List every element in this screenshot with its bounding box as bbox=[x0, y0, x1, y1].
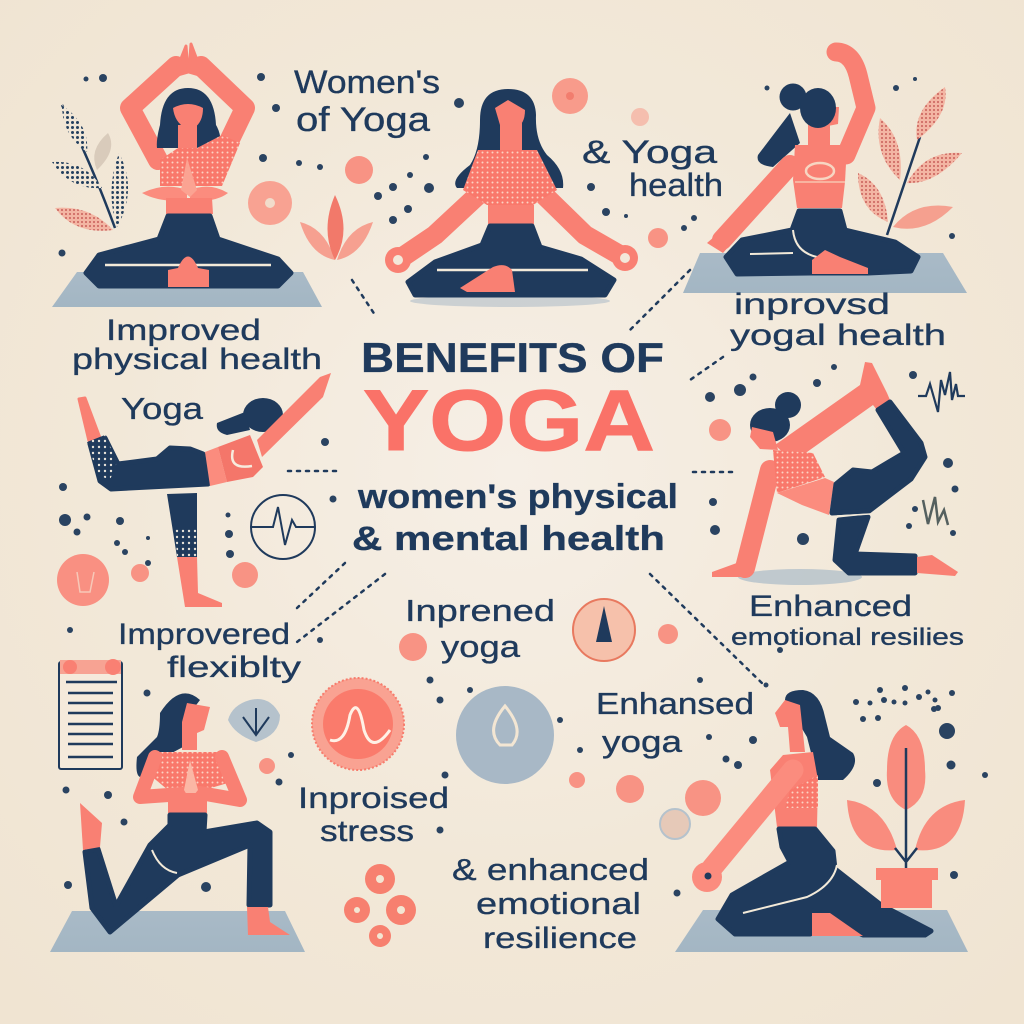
icon: pulse sketch right upper bbox=[918, 372, 965, 412]
label: & enhanced emotional resilience: resilience bbox=[483, 922, 637, 955]
label: Inprovsd yogal health: yogal health bbox=[730, 319, 946, 352]
icon: coral wave badge bbox=[312, 678, 404, 770]
label: & enhanced emotional resilience: & enhanced bbox=[452, 852, 649, 887]
label: Improved physical health: physical health bbox=[72, 343, 322, 376]
label: Enhansed yoga bbox=[596, 686, 754, 759]
label: & Yoga health: health bbox=[629, 167, 723, 203]
label: Improved physical health: Improved bbox=[106, 314, 261, 347]
icon: grey disc bbox=[660, 809, 690, 839]
label: Enhansed yoga: Enhansed bbox=[596, 686, 754, 721]
label: Women's of Yoga: Women's bbox=[294, 64, 440, 100]
label: Inproised stress: Inproised bbox=[298, 782, 449, 815]
label: Improvered flexibilty: flexiblty bbox=[167, 651, 301, 684]
label: Yoga: Yoga bbox=[121, 391, 204, 426]
title: women's physical bbox=[357, 478, 678, 516]
figure: middle-left standing balance pose bbox=[79, 373, 331, 607]
icon: compass badge bbox=[573, 599, 635, 661]
title: BENEFITS OF bbox=[361, 334, 664, 381]
figure: top-center seated meditation pose bbox=[385, 89, 638, 307]
label: Enhanced emotional resilies: emotional resilies bbox=[731, 624, 964, 651]
label: Inprovsd yogal health: inprovsd bbox=[734, 288, 890, 321]
label: Women's of Yoga: of Yoga bbox=[296, 101, 430, 139]
label: Inprened yoga: yoga bbox=[441, 629, 521, 664]
title: & mental health bbox=[352, 520, 665, 558]
label: Improvered flexibilty: Improvered bbox=[118, 618, 290, 651]
decorative dashed connectors bbox=[288, 270, 765, 686]
label: Inproised stress: stress bbox=[320, 815, 414, 848]
icon: coral ring top-center bbox=[552, 78, 588, 114]
icon: lotus bbox=[300, 195, 373, 260]
label: Inproised stress bbox=[298, 782, 449, 848]
title bbox=[352, 334, 678, 558]
figure: top-right side-seated pose with raised arm bbox=[683, 52, 967, 293]
label: & enhanced emotional resilience bbox=[452, 852, 649, 955]
label: Enhanced emotional resilies bbox=[731, 590, 964, 651]
title: YOGA bbox=[363, 373, 655, 469]
figure: middle-right dancer pose bbox=[712, 362, 958, 585]
icon: coral circle left bbox=[57, 554, 109, 606]
icon: small coral discs bbox=[131, 108, 731, 816]
label: Inprovsd yogal health bbox=[730, 288, 946, 352]
label: Improvered flexibilty bbox=[118, 618, 301, 684]
label: & Yoga health bbox=[582, 134, 723, 203]
label: Enhanced emotional resilies: Enhanced bbox=[749, 590, 912, 623]
figure: top-left seated yoga pose with raised arms bbox=[52, 44, 322, 307]
icon: checklist clipboard bbox=[59, 659, 122, 769]
icon: target circle top-left bbox=[248, 181, 292, 225]
icon: arrow badge bbox=[228, 699, 280, 742]
icon: cluster of coral rings bbox=[344, 864, 416, 947]
label: & Yoga health: & Yoga bbox=[582, 134, 717, 170]
label: & enhanced emotional resilience: emotional bbox=[476, 886, 641, 921]
label: Enhansed yoga: yoga bbox=[602, 724, 683, 759]
decorative dots bbox=[58, 73, 988, 896]
label: Women's of Yoga bbox=[294, 64, 440, 139]
icon: heartbeat circle bbox=[251, 495, 315, 559]
label: Inprened yoga: Inprened bbox=[405, 593, 555, 628]
figure: bottom-right seated side stretch with plant bbox=[675, 690, 968, 952]
figure: bottom-left lunge pose with prayer hands bbox=[50, 693, 305, 952]
icon: pulse sketch right lower bbox=[923, 497, 948, 525]
label: Improved physical health bbox=[72, 314, 322, 376]
label: Inprened yoga bbox=[405, 593, 555, 664]
icon: drop badge bbox=[456, 686, 554, 784]
